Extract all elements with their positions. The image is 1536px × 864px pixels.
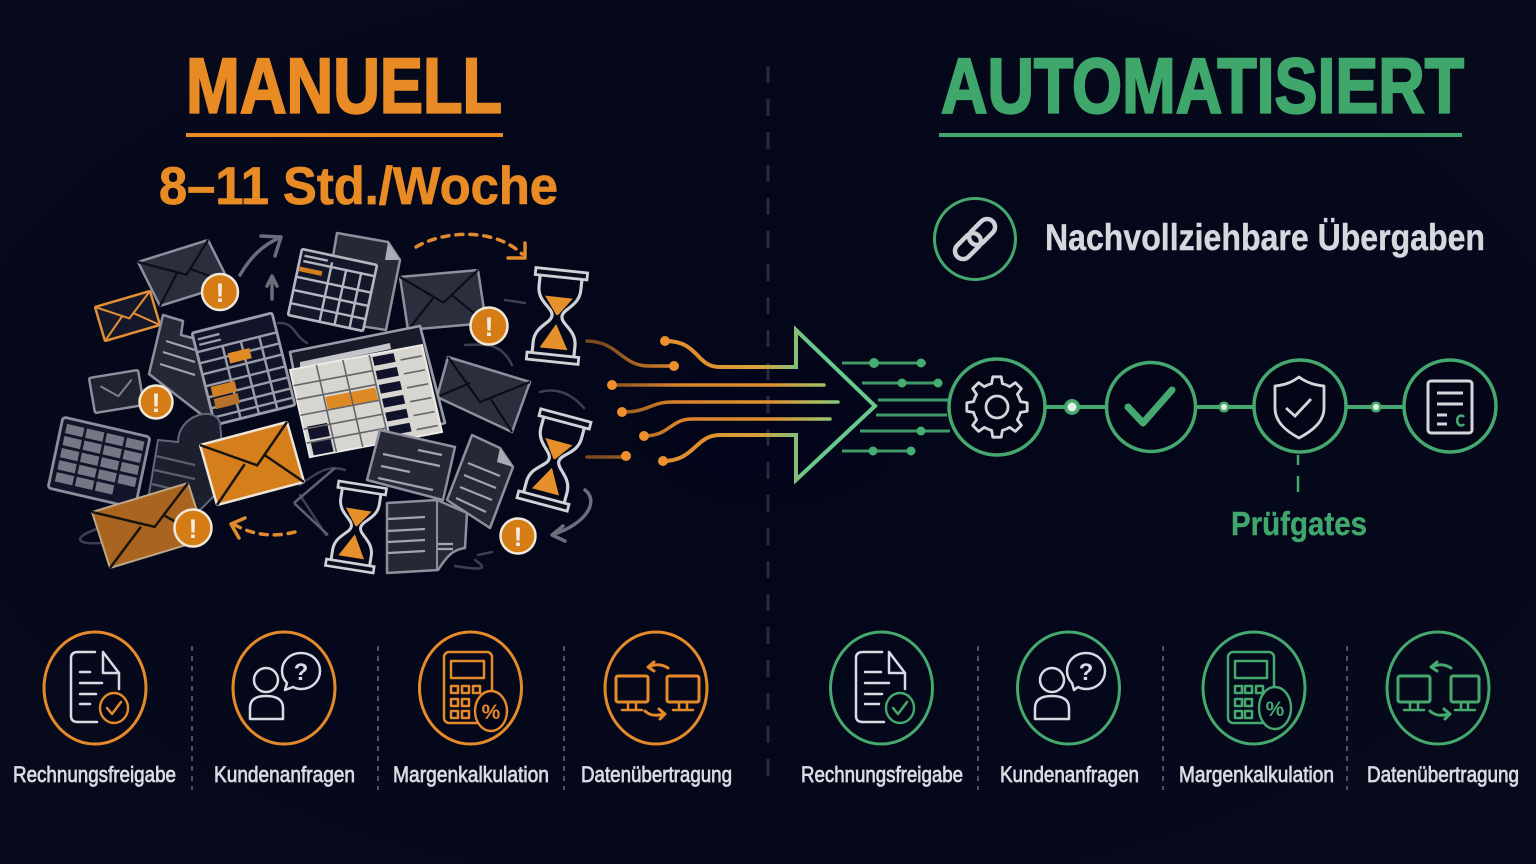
alert badge 4: ! (484, 312, 494, 342)
label: pruefgates: Prüfgates (1231, 505, 1367, 542)
label: Margenkalkulation (1179, 762, 1334, 787)
flow lines (587, 341, 838, 457)
task: data transfer (581, 632, 732, 787)
faint connector strokes (80, 300, 584, 568)
label: Rechnungsfreigabe (13, 762, 176, 787)
column dividers (192, 646, 1347, 790)
panel: manual (48, 42, 591, 573)
label: Margenkalkulation (393, 762, 549, 787)
row: automated tasks (801, 632, 1519, 787)
step: check (1106, 362, 1196, 452)
alert badge 5: ! (514, 522, 522, 552)
alert badge 4 (470, 308, 508, 344)
document: lower wide (367, 430, 455, 500)
transition arrow (587, 330, 950, 480)
chaos pile of office items (48, 233, 591, 573)
arrow: orange dashed lower (235, 525, 295, 535)
arrow: grey up (267, 276, 277, 299)
document: left (149, 315, 215, 425)
task: customer enquiries: ? (1079, 659, 1093, 686)
alert badge 2: ! (152, 388, 160, 418)
task: margin calculation (393, 632, 549, 787)
task: data transfer (1367, 632, 1519, 787)
task: customer enquiries (214, 632, 355, 787)
spreadsheet: large light (290, 326, 445, 457)
node dots (607, 336, 679, 466)
envelope: dark top right (400, 270, 486, 330)
label: Rechnungsfreigabe (801, 762, 963, 787)
envelope: orange outline (95, 291, 160, 341)
label: Datenübertragung (581, 762, 732, 787)
spreadsheet: top (288, 249, 377, 331)
step: shield (1254, 360, 1346, 452)
task: customer enquiries: ? (294, 659, 308, 686)
arrow head: orange top (508, 243, 525, 258)
output lines (842, 363, 950, 451)
arrow: orange dashed top (416, 234, 522, 254)
title: manuell: MANUELL (186, 42, 502, 130)
task: margin calculation (1179, 632, 1334, 787)
document: lower curled (387, 500, 467, 573)
document: behind orange envelope (148, 414, 240, 510)
hourglass 1 (526, 268, 588, 364)
step: gear (949, 359, 1045, 455)
envelope: grey outline behind (294, 468, 335, 535)
task: customer enquiries (1000, 632, 1139, 787)
arrow outline (663, 330, 875, 480)
arrow: grey curved lower right (552, 490, 591, 541)
alert badge 1: ! (216, 278, 224, 308)
icon: chain link (934, 198, 1016, 280)
alert badge 2 (140, 386, 172, 418)
envelope: dark top left (138, 240, 230, 306)
task: margin calculation: % (482, 701, 501, 724)
alert badge 3: ! (188, 514, 198, 544)
alert badge 1 (202, 274, 238, 310)
task: invoice approval (801, 632, 963, 787)
process chain (949, 359, 1496, 455)
document: lower right (447, 435, 513, 528)
alert badge 5 (500, 518, 536, 554)
label: Kundenanfragen (214, 762, 355, 787)
centre divider (766, 66, 770, 790)
inspection gate stem (1297, 455, 1299, 492)
subtitle: hours per week: 8–11 Std./Woche (159, 157, 558, 216)
row: manual tasks (13, 632, 732, 787)
arrow: grey curved up (240, 236, 281, 275)
envelope: dark small (89, 370, 144, 413)
connector (1045, 405, 1405, 409)
arrow head: orange lower (231, 518, 245, 538)
connector node 1 (1064, 399, 1080, 415)
connector node 2 (1218, 402, 1230, 412)
connector node 3 (1370, 402, 1382, 412)
label: Kundenanfragen (1000, 762, 1139, 787)
hourglass 3 (325, 481, 387, 573)
envelope: orange centre (200, 422, 304, 505)
title underline: manuell (186, 133, 503, 137)
panel: automated (934, 42, 1496, 542)
task: invoice approval (13, 632, 176, 787)
document: top (322, 233, 400, 330)
keyboard grid (48, 417, 150, 508)
step: report (1404, 360, 1496, 452)
title underline: automatisiert (939, 133, 1462, 137)
spreadsheet: dark with orange cells (192, 313, 295, 425)
alert badge 3 (174, 510, 212, 546)
envelope: orange lower (92, 483, 206, 568)
task: margin calculation: % (1266, 698, 1285, 721)
output dots (868, 358, 942, 456)
hourglass 2 (517, 409, 591, 511)
envelope: dark middle right (437, 357, 530, 432)
